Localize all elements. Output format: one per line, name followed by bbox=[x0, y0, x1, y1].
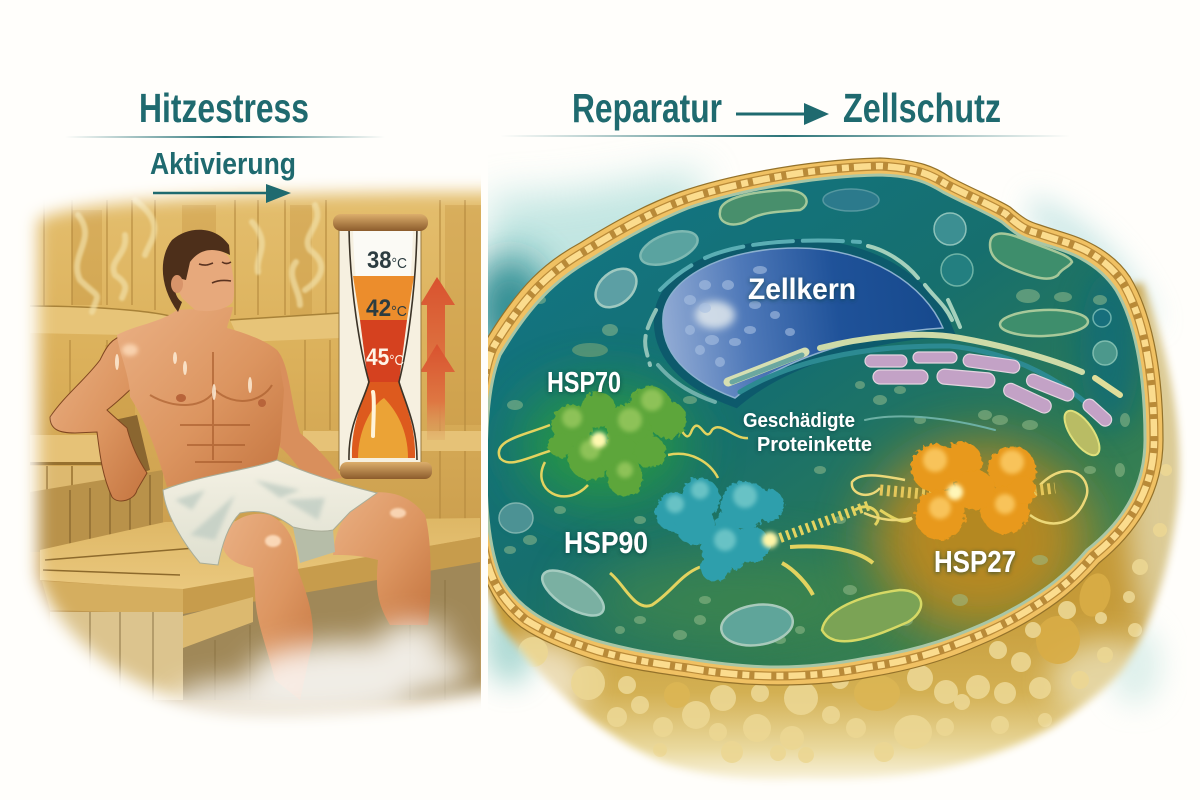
amber and green glows bbox=[870, 445, 1090, 635]
cytoplasm granules bbox=[504, 289, 1130, 644]
protein HSP90 with chain bbox=[610, 478, 912, 606]
rising arrows bbox=[420, 277, 455, 440]
protein HSP70 with chain bbox=[499, 386, 748, 496]
hair bbox=[163, 230, 230, 312]
sweat drops bbox=[115, 352, 252, 400]
cell fat tissue bbox=[488, 278, 1185, 782]
rising steam at floor bbox=[170, 623, 470, 722]
dark ring around nucleus bbox=[663, 248, 943, 398]
membrane dashes around nucleus bbox=[645, 241, 960, 402]
temperature labels: 38°C bbox=[367, 247, 407, 274]
heading rule left bbox=[65, 136, 385, 138]
arm resting on backrest bbox=[50, 335, 147, 501]
torso bbox=[117, 307, 286, 487]
wooden sauna wall bbox=[0, 170, 482, 730]
hourglass thermometer bbox=[333, 214, 432, 479]
label: HSP90: HSP90 bbox=[564, 525, 648, 560]
label: Geschädigte Proteinkette bbox=[743, 410, 872, 456]
label: Zellkern: Zellkern bbox=[748, 273, 856, 306]
golgi purple stacks bbox=[865, 352, 1114, 461]
hourglass thermometer: 42°C bbox=[366, 295, 407, 322]
nucleus bbox=[663, 248, 943, 398]
chest and abdominal muscles bbox=[150, 352, 272, 462]
label: Geschädigte Proteinkette: Proteinkette bbox=[757, 434, 872, 456]
label: HSP70: HSP70 bbox=[547, 367, 621, 399]
inner membrane line bbox=[486, 175, 1145, 667]
arrow: activation bbox=[153, 184, 291, 203]
arrow: repair to cell protection bbox=[736, 103, 829, 125]
towel bbox=[163, 460, 377, 565]
label: HSP27: HSP27 bbox=[934, 544, 1016, 579]
sauna bench bbox=[40, 518, 480, 700]
label: Aktivierung: Aktivierung bbox=[150, 146, 296, 181]
teal haze around cell bbox=[472, 170, 1161, 705]
endoplasmic reticulum bands bbox=[728, 335, 1120, 430]
steam waves bbox=[77, 200, 321, 312]
panel: cell with haze, fat tissue and cytoplasm bbox=[470, 158, 1200, 790]
fat droplets bbox=[518, 464, 1172, 763]
cell membrane band bbox=[470, 158, 1163, 685]
heading: Reparatur: Reparatur bbox=[572, 85, 722, 131]
near and far legs bbox=[333, 492, 431, 625]
heading: Zellschutz: Zellschutz bbox=[843, 85, 1001, 131]
right arm bbox=[277, 350, 342, 482]
heading: Hitzestress: Hitzestress bbox=[139, 85, 309, 131]
organelles bbox=[499, 189, 1117, 650]
protein HSP27 with chain bbox=[852, 442, 1087, 540]
heading rule right bbox=[500, 135, 1070, 137]
head and face bbox=[178, 249, 234, 311]
panel: Hitzestress sauna scene bbox=[0, 170, 482, 730]
hourglass thermometer: 45°C bbox=[366, 344, 404, 371]
cytoplasm bbox=[488, 176, 1144, 666]
man relaxing in sauna bbox=[50, 230, 431, 700]
label: Geschädigte Proteinkette: Geschädigte bbox=[743, 410, 855, 432]
